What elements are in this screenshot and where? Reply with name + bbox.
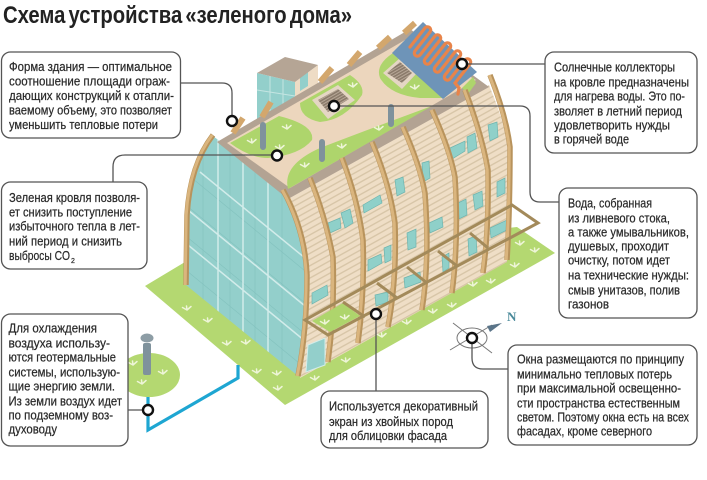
callout: geothermal systems: щие энергию земли. (8, 380, 115, 394)
vent pipes (263, 107, 391, 159)
callout: geothermal systems: Для охлаждения (8, 322, 97, 336)
geothermal air duct (118, 334, 238, 430)
callout: geothermal systems: духоводу (8, 422, 58, 436)
ground lawn (145, 227, 555, 405)
callout: green roof: выбросы CO (9, 249, 70, 263)
callout: windows (508, 345, 697, 445)
roof tabs (233, 23, 415, 133)
solar collector (392, 22, 477, 99)
callout: green roof (2, 182, 147, 269)
callout: building form: уменьшить тепловые потери (9, 118, 158, 132)
connector: green roof (113, 150, 282, 182)
callout: wood screen: экран из хвойных пород (329, 415, 454, 429)
facade: wood screen wall (288, 85, 510, 378)
lawn circle (118, 353, 180, 397)
back tower (257, 57, 318, 125)
callout: water reuse: из ливневого стока, (568, 212, 670, 226)
callout: solar collectors: в горячей воде (554, 132, 629, 146)
connector: building form (180, 83, 237, 126)
pergola (305, 205, 538, 335)
compass (450, 309, 517, 353)
callout: water reuse: душевых, проходит (568, 240, 669, 254)
callout: geothermal systems: ются геотермальные (8, 350, 116, 364)
connector: water (329, 101, 559, 202)
callout: wood screen (321, 391, 488, 448)
callout: water reuse: очистку, потом идет (568, 254, 670, 268)
callout: building form: соотношение площади ограж- (9, 74, 170, 88)
callout: windows: при максимальной освещенно- (517, 382, 681, 396)
callout: windows: сти пространства естественным (517, 396, 680, 410)
callout: building form: дающих конструкций к отапли- (9, 89, 174, 103)
connector: geothermal (128, 405, 153, 415)
roof vents (312, 58, 417, 119)
windows (312, 122, 507, 306)
callout: geothermal systems (2, 314, 128, 446)
callout: green roof: избыточного тепла в лет- (9, 220, 140, 234)
illustration: green house building (145, 22, 555, 405)
callout: green roof: ний период и снизить (9, 234, 122, 248)
callout: wood screen: для облицовки фасада (329, 429, 447, 443)
roof rim (217, 29, 489, 199)
callout: geothermal systems: Из земли воздух идет (8, 394, 122, 408)
callout: solar collectors: удовлетворить нужды (554, 118, 670, 132)
callout: water reuse: на технические нужды: (568, 268, 689, 282)
callout: building form: ваемому объему, это позволяет (9, 104, 172, 118)
connector: solar collectors (457, 59, 545, 69)
callout: solar collectors: Солнечные коллекторы (554, 60, 675, 74)
callout: green roof: 2 (71, 258, 75, 265)
green roof patches (230, 53, 476, 189)
compass: N (507, 309, 517, 324)
callout: windows: Окна размещаются по принципу (517, 352, 685, 366)
title: Схема устройства «зеленого дома» (3, 2, 352, 29)
callout: solar collectors (545, 52, 697, 153)
grass tufts (182, 83, 539, 390)
callout: water reuse: смыв унитазов, полив (568, 284, 680, 298)
timber ribs (185, 75, 510, 376)
glass door (306, 338, 325, 372)
callout: geothermal systems: воздуха использу- (8, 336, 110, 350)
underground duct (148, 365, 238, 430)
callout: water reuse: Вода, собранная (568, 196, 652, 210)
callout: building form (2, 52, 180, 138)
callout: building form: Форма здания — оптимальное (9, 60, 172, 74)
callout: solar collectors: для нагрева воды. Это по- (554, 90, 685, 104)
facade: glass front (186, 137, 304, 374)
roof deck (227, 40, 476, 188)
connector: windows (467, 333, 508, 369)
callout: windows: минимально тепловых потерь (517, 368, 672, 382)
callout: solar collectors: зволяет в летний период (554, 104, 683, 118)
callout: geothermal systems: системы, использую- (8, 366, 120, 380)
callout: water reuse: газонов (568, 298, 609, 312)
callout: solar collectors: на кровле предназначены (554, 76, 689, 90)
air intake pipe (140, 334, 154, 375)
callout: water reuse: а также умывальников, (568, 226, 689, 240)
callout: water reuse (559, 188, 697, 318)
callout: green roof: ет снизить поступление (9, 206, 132, 220)
callout: wood screen: Используется декоративный (329, 400, 478, 414)
connector: wood screen (371, 309, 381, 391)
callout: green roof: Зеленая кровля позволя- (9, 191, 140, 205)
callout: geothermal systems: по подземному воз- (8, 408, 113, 422)
callout: windows: фасадах, кроме северного (517, 424, 652, 438)
